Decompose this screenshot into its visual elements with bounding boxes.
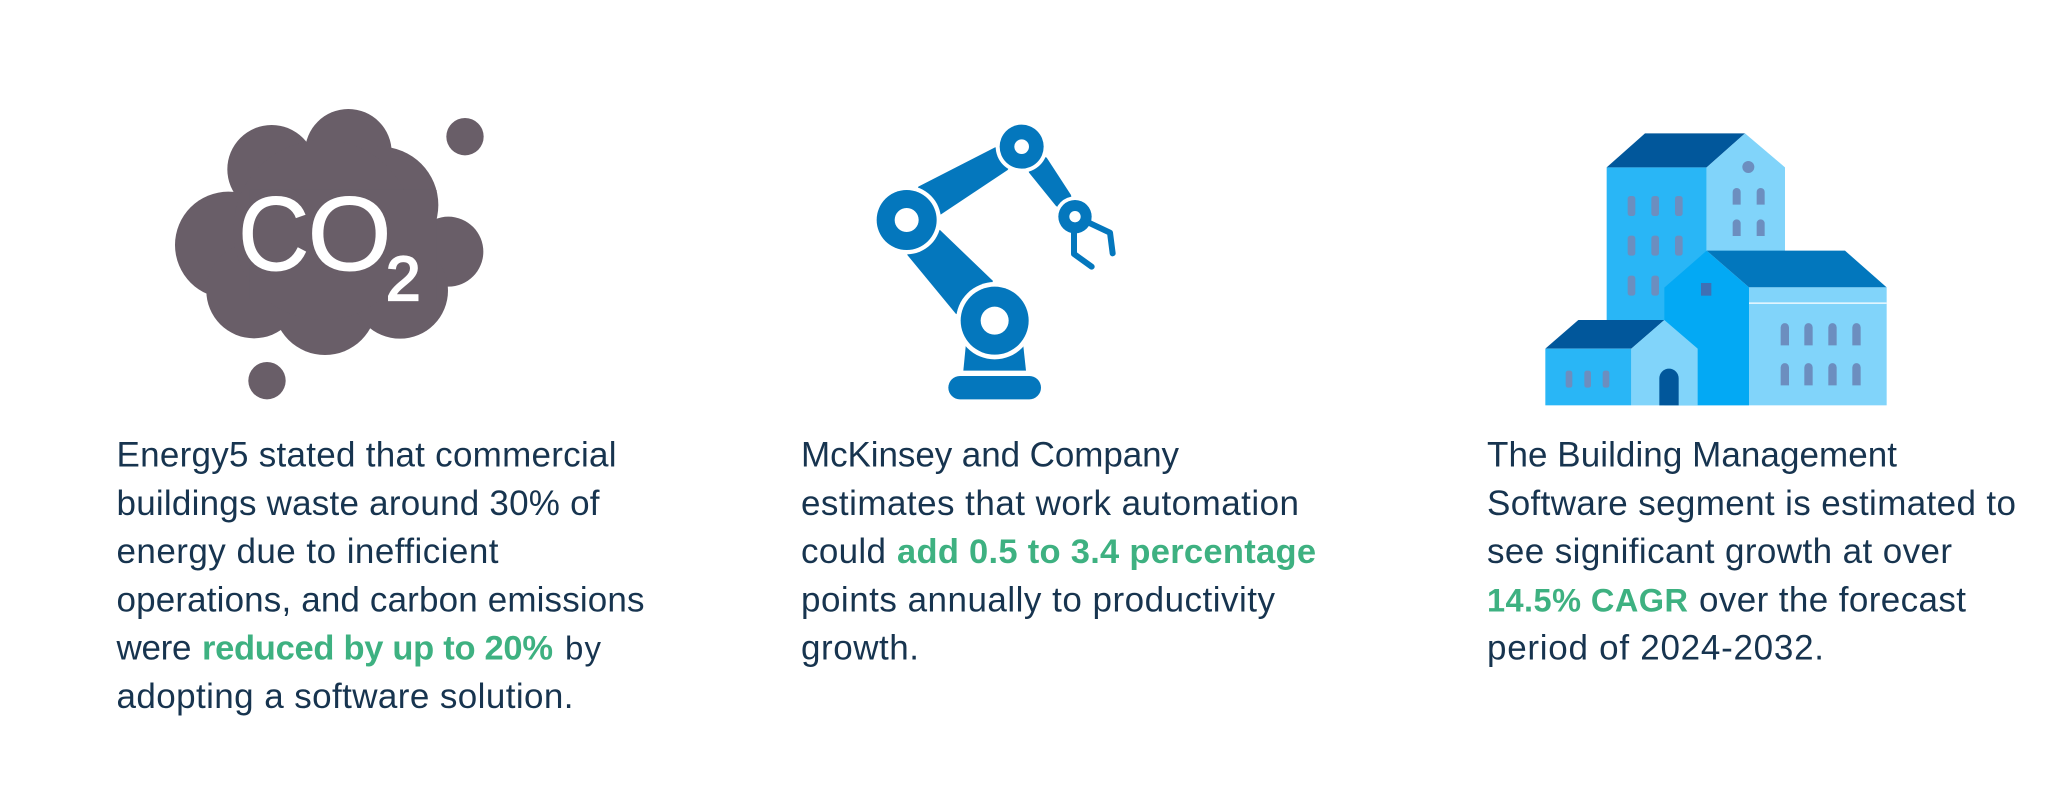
text: energy5 statement: adopting a software solution. [116, 677, 574, 716]
text: energy5 statement: operations, and carbon emissions [116, 580, 644, 619]
text: McKinsey statement: McKinsey and Company [801, 436, 1180, 474]
highlight: reduced by up to 20%: reduced by up to 20% [202, 630, 553, 668]
text: energy5 statement [116, 436, 644, 716]
highlight: add 0.5 to 3.4 percentage: add 0.5 to 3.4 percentage [897, 533, 1316, 571]
text: energy5 statement: energy due to inefficient [116, 532, 499, 571]
text: building management statement: The Building Management [1487, 436, 1897, 474]
icon: CO2 cloud: 2 [386, 245, 420, 314]
highlight: 14.5% CAGR: 14.5% CAGR [1487, 582, 1688, 618]
icon: buildings [1545, 133, 1887, 405]
panel: work automation [801, 121, 1316, 668]
text: McKinsey statement: points annually to productivity [801, 580, 1276, 619]
panel: energy waste [116, 109, 644, 716]
icon: CO2 cloud [175, 109, 484, 399]
text: building management statement: Software segment is estimated to [1487, 484, 2016, 523]
text: building management statement: see significant growth at over [1487, 532, 1952, 571]
icon: robot arm [872, 121, 1113, 399]
text: McKinsey statement: estimates that work automation [801, 484, 1299, 523]
text: building management statement: period of 2024-2032. [1487, 629, 1824, 668]
text: energy5 statement: were [116, 629, 192, 668]
icon: CO2 cloud: C [238, 175, 309, 293]
text: energy5 statement: by [565, 630, 602, 667]
text: energy5 statement: Energy5 stated that commercial [116, 436, 616, 474]
text: McKinsey statement [801, 436, 1316, 668]
text: building management statement [1487, 436, 2016, 668]
text: McKinsey statement: growth. [801, 629, 919, 668]
icon: CO2 cloud: O [308, 175, 392, 293]
text: building management statement: over the forecast [1699, 580, 1966, 619]
text: energy5 statement: buildings waste around 30% of [116, 484, 600, 523]
panel: building management software [1487, 133, 2016, 668]
text: McKinsey statement: could [801, 532, 886, 571]
